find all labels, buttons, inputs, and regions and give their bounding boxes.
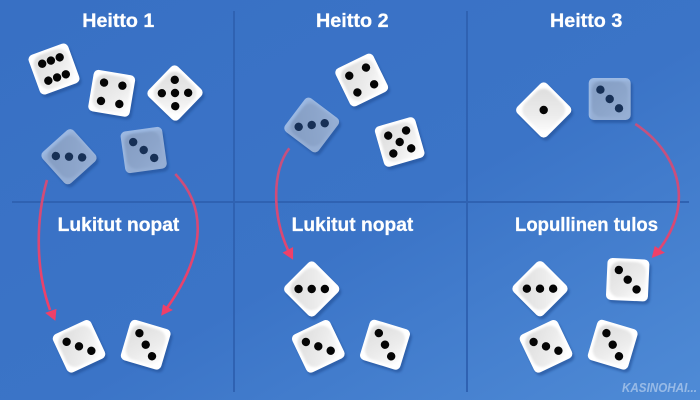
heading: Heitto 1: Heitto 1: [82, 11, 155, 32]
arrow: third roll die to final result: [635, 124, 679, 257]
die: final three bottom left: [518, 318, 576, 377]
arrow: first roll right die to locked: [162, 174, 198, 315]
die: four: [88, 69, 138, 120]
die: locked three left: [290, 318, 348, 377]
die: newly locked three: [282, 259, 343, 322]
die: five: [145, 63, 207, 126]
panel: Heitto 2: [282, 11, 428, 171]
die: final three bottom right: [587, 319, 641, 374]
heading: Heitto 2: Heitto 2: [316, 11, 389, 32]
die: faded three, diamond: [39, 127, 101, 189]
die: locked three right: [120, 319, 174, 374]
panel: Heitto 1: [27, 11, 207, 189]
die: five: [374, 116, 428, 171]
heading: Heitto 3: Heitto 3: [550, 11, 622, 32]
die: faded three, tilted: [120, 126, 169, 177]
panel: Lukitut nopat 2: [282, 215, 414, 377]
die: faded three: [589, 78, 633, 123]
die: six: [27, 42, 83, 99]
heading: Lukitut nopat: Lukitut nopat: [58, 215, 180, 236]
panel: Lopullinen tulos: [510, 215, 658, 377]
die: locked three left: [51, 318, 109, 377]
arrow: first roll left die to locked: [39, 180, 56, 320]
die: locked three right: [359, 318, 413, 374]
die: one: [514, 80, 575, 143]
die: four: [334, 52, 392, 111]
die: faded three: [282, 96, 343, 157]
heading: Lukitut nopat: Lukitut nopat: [292, 215, 414, 236]
die: final three top right: [606, 258, 652, 305]
panel: Heitto 3: [514, 11, 633, 143]
arrow: second roll die to locked: [276, 148, 293, 259]
heading: Lopullinen tulos: Lopullinen tulos: [515, 215, 658, 236]
die: final three diamond: [510, 259, 572, 321]
panel: Lukitut nopat 1: [51, 215, 180, 377]
